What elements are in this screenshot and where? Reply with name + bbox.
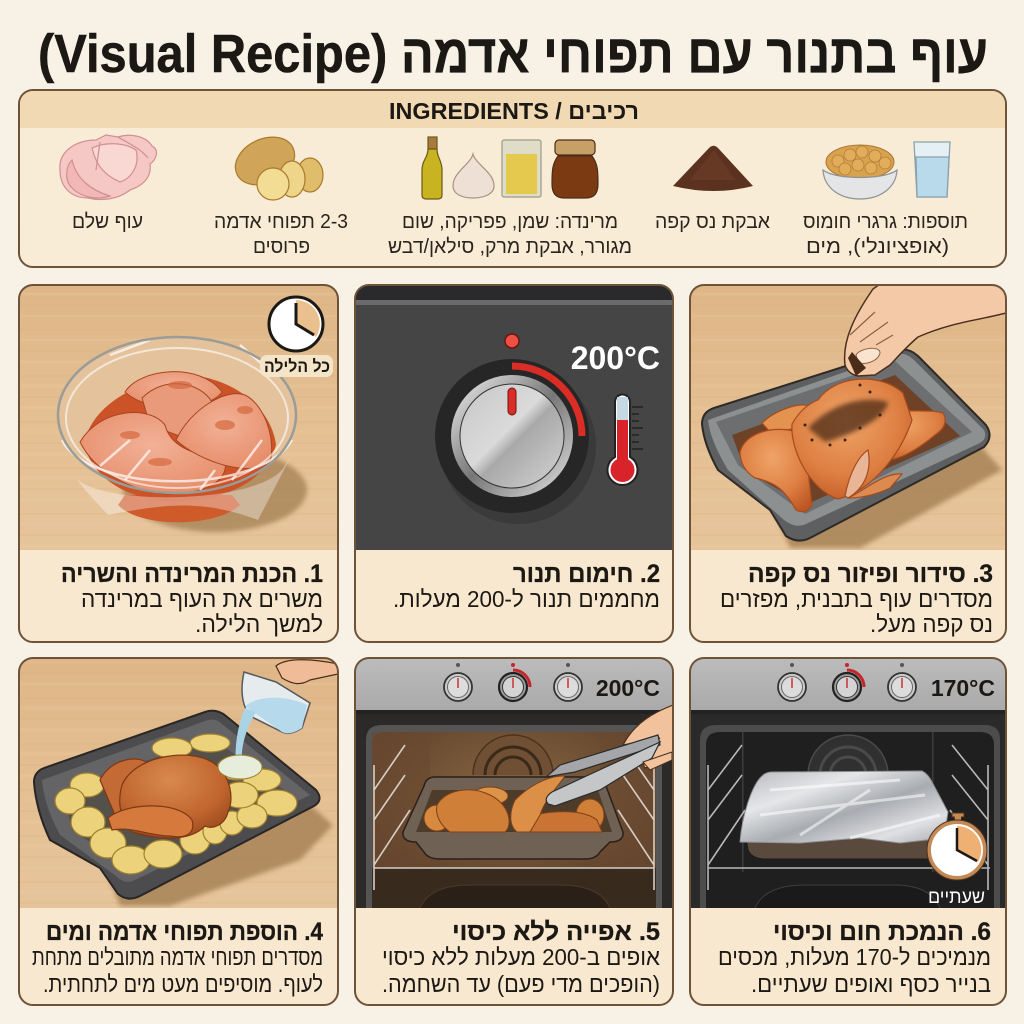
caption: step 4: 4. הוספת תפוחי אדמה ומים	[46, 918, 323, 946]
caption: step 5: 5. אפייה ללא כיסוי	[452, 918, 660, 946]
icon: raw chicken	[60, 135, 156, 199]
caption: step 1	[61, 560, 323, 637]
caption: step 2: מחממים תנור ל-200 מעלות.	[393, 586, 660, 612]
illustration: bowl with chicken	[19, 285, 338, 550]
caption: step 1: משרים את העוף במרינדה	[81, 586, 323, 612]
icon: timer	[927, 813, 987, 880]
panel: ingredients	[19, 90, 1006, 267]
badge: overnight: כל הלילה	[264, 357, 330, 376]
label: marinade: מרינדה: שמן, פפריקה, שום	[402, 211, 618, 233]
caption: step 1: למשך הלילה.	[195, 611, 323, 637]
caption: step 6: בנייר כסף ואופים שעתיים.	[751, 971, 991, 997]
caption: step 3: נס קפה מעל.	[870, 611, 993, 637]
caption: step 6: 6. הנמכת חום וכיסוי	[773, 918, 991, 946]
label: 200C: 200°C	[571, 340, 660, 376]
caption: step 6: מנמיכים ל-170 מעלות, מכסים	[718, 944, 991, 970]
caption: step 3	[720, 560, 993, 637]
illustration: open oven	[355, 658, 673, 908]
panel: step 2 preheat	[355, 285, 673, 642]
icon: oil bottle	[422, 137, 442, 199]
oven control panel: 200°C	[596, 675, 660, 701]
badge: two hours: שעתיים	[928, 887, 985, 908]
caption: step 5: (הופכים מדי פעם) עד השחמה.	[382, 971, 660, 997]
chicken pieces	[424, 776, 604, 832]
label: potatoes: פרוסים	[253, 236, 310, 258]
panel: step 5 bake uncovered	[355, 658, 673, 1005]
panel: step 3 arrange and sprinkle	[690, 284, 1006, 642]
label: whole chicken: עוף שלם	[72, 211, 143, 233]
rack	[708, 745, 990, 890]
aluminium foil	[740, 771, 948, 843]
icon: water glass	[914, 142, 950, 197]
label: extras: תוספות: גרגרי חומוס	[803, 211, 968, 233]
icon: chickpeas bowl	[823, 145, 897, 199]
baking pan	[747, 838, 928, 858]
illustration: oven with foil	[690, 658, 1006, 908]
caption: step 3: 3. סידור ופיזור נס קפה	[748, 560, 993, 588]
label: extras	[803, 211, 968, 258]
oven cavity	[366, 725, 662, 908]
caption: step 1: 1. הכנת המרינדה והשריה	[61, 560, 323, 588]
baking tray	[403, 777, 623, 859]
roast chicken	[100, 755, 231, 838]
heading: ingredients: רכיבים / INGREDIENTS	[389, 98, 639, 124]
tongs and hand	[546, 705, 673, 806]
water stream	[218, 708, 262, 779]
hand	[276, 660, 338, 684]
label: coffee: אבקת נס קפה	[655, 211, 770, 233]
caption: step 4: לעוף. מוסיפים מעט מים לתחתית.	[43, 971, 323, 997]
label: marinade	[388, 211, 632, 258]
icon: garlic	[453, 154, 494, 198]
oven control panel: 170°C	[931, 675, 995, 701]
chicken	[740, 379, 945, 512]
oven cavity	[700, 725, 1000, 908]
oven control panel	[355, 658, 673, 714]
icon: coffee powder	[673, 146, 753, 191]
label: potatoes: 2-3 תפוחי אדמה	[214, 211, 348, 233]
illustration: oven dial	[355, 285, 673, 550]
coffee sprinkle	[808, 400, 888, 442]
caption: step 3: מסדרים עוף בתבנית, מפזרים	[720, 586, 993, 612]
icon: thermometer	[608, 395, 643, 485]
label: marinade: מגורר, אבקת מרק, סילאן/דבש	[388, 236, 632, 258]
illustration: chicken in tray	[690, 284, 1006, 550]
panel: step 4 potatoes and water	[19, 658, 338, 1005]
illustration: tray with potatoes	[19, 658, 338, 908]
potato slices	[55, 734, 297, 874]
caption: step 4	[32, 918, 323, 997]
icon: spice packet	[502, 140, 541, 197]
hand	[845, 284, 1006, 376]
title: עוף בתנור עם תפוחי אדמה (Visual Recipe)	[38, 24, 988, 84]
icon: clock	[269, 297, 323, 351]
caption: step 2	[393, 560, 660, 612]
panel: step 1 marinate	[19, 285, 338, 642]
measuring jug	[242, 672, 310, 733]
caption: step 2: 2. חימום תנור	[513, 560, 660, 588]
rack	[374, 745, 654, 890]
icon: potatoes	[228, 128, 323, 200]
caption: step 6	[718, 918, 991, 997]
label: extras: (אופציונלי), מים	[806, 236, 949, 258]
panel: step 6 reduce heat and cover	[690, 658, 1006, 1005]
oven control panel	[690, 658, 1006, 714]
caption: step 5	[382, 918, 661, 997]
caption: step 5: אופים ב-200 מעלות ללא כיסוי	[382, 944, 661, 970]
icon: honey jar	[552, 140, 598, 198]
label: potatoes	[214, 211, 348, 258]
caption: step 4: מסדרים תפוחי אדמה מתובלים מתחת	[32, 944, 323, 970]
